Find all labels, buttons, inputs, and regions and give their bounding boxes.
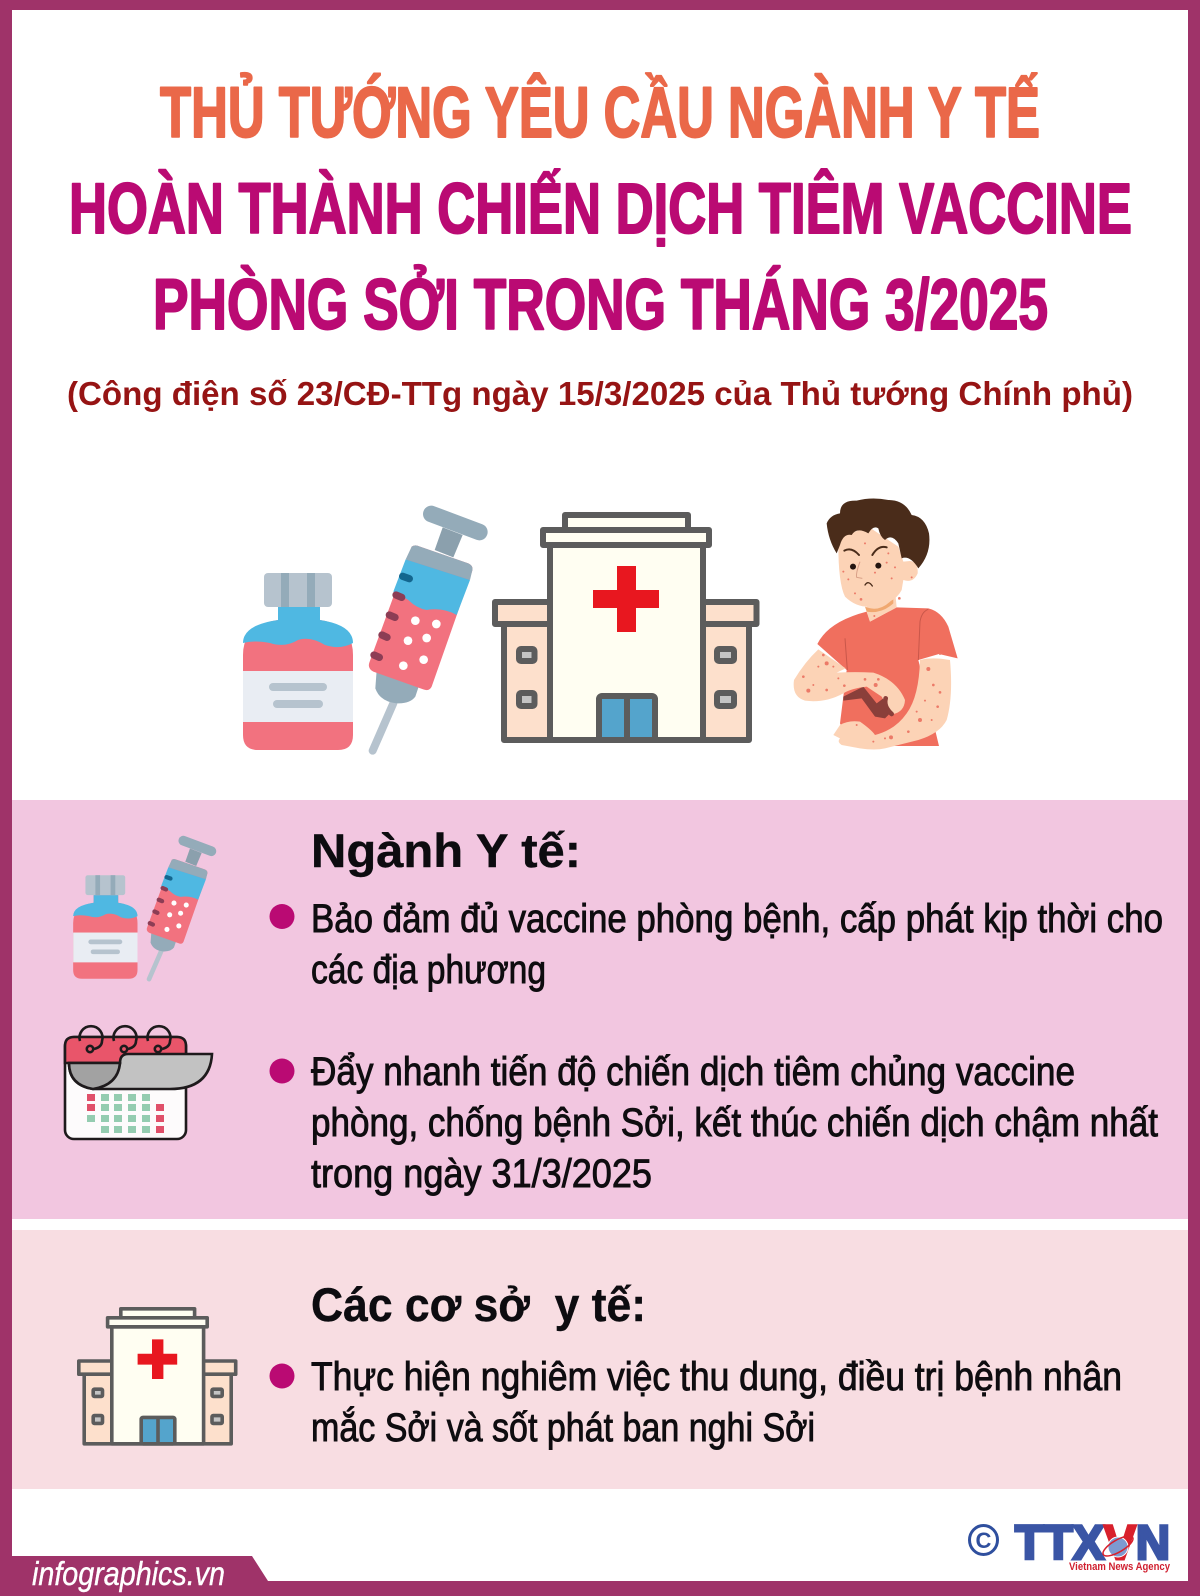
footer tag: infographics.vn <box>0 1555 1188 1596</box>
bullet 2 <box>270 1050 1158 1196</box>
bullet 1: các địa phương <box>311 948 546 992</box>
logo: TTXVN: C <box>976 1528 992 1553</box>
bullet 2: trong ngày 31/3/2025 <box>311 1152 652 1196</box>
icon: vaccine small <box>73 841 211 979</box>
logo: TTXVN: Vietnam News Agency <box>1069 1561 1171 1573</box>
heading: Ngành Y tế: Ngành Y tế: <box>311 824 581 877</box>
heading: Các cơ sở y tế: Các cơ sở y tế: <box>311 1278 646 1331</box>
subtitle: (Công điện số 23/CĐ-TTg ngày 15/3/2025 của Thủ tướng Chính phủ) <box>67 375 1133 412</box>
bullet 1 <box>270 897 1163 992</box>
bullet 3 <box>270 1355 1122 1450</box>
logo: TTXVN: TTXVN <box>1015 1517 1170 1570</box>
panel: Các cơ sở y tế <box>12 1230 1188 1489</box>
icon: calendar <box>65 1026 212 1139</box>
icon: hospital small <box>79 1309 236 1444</box>
icon: vaccine bottle and syringe <box>243 514 479 751</box>
footer tag: infographics.vn: infographics.vn <box>32 1555 225 1592</box>
calendar grid <box>87 1094 164 1133</box>
panel: Ngành Y tế <box>12 800 1188 1219</box>
title <box>69 73 1132 345</box>
icon: hospital <box>495 515 756 740</box>
icon: boy with measles rash <box>794 498 958 749</box>
bullet 2: Đẩy nhanh tiến độ chiến dịch tiêm chủng vaccine <box>311 1050 1075 1094</box>
bullet 3: Thực hiện nghiêm việc thu dung, điều trị bệnh nhân <box>311 1355 1122 1399</box>
bullet 3: mắc Sởi và sốt phát ban nghi Sởi <box>311 1405 815 1450</box>
